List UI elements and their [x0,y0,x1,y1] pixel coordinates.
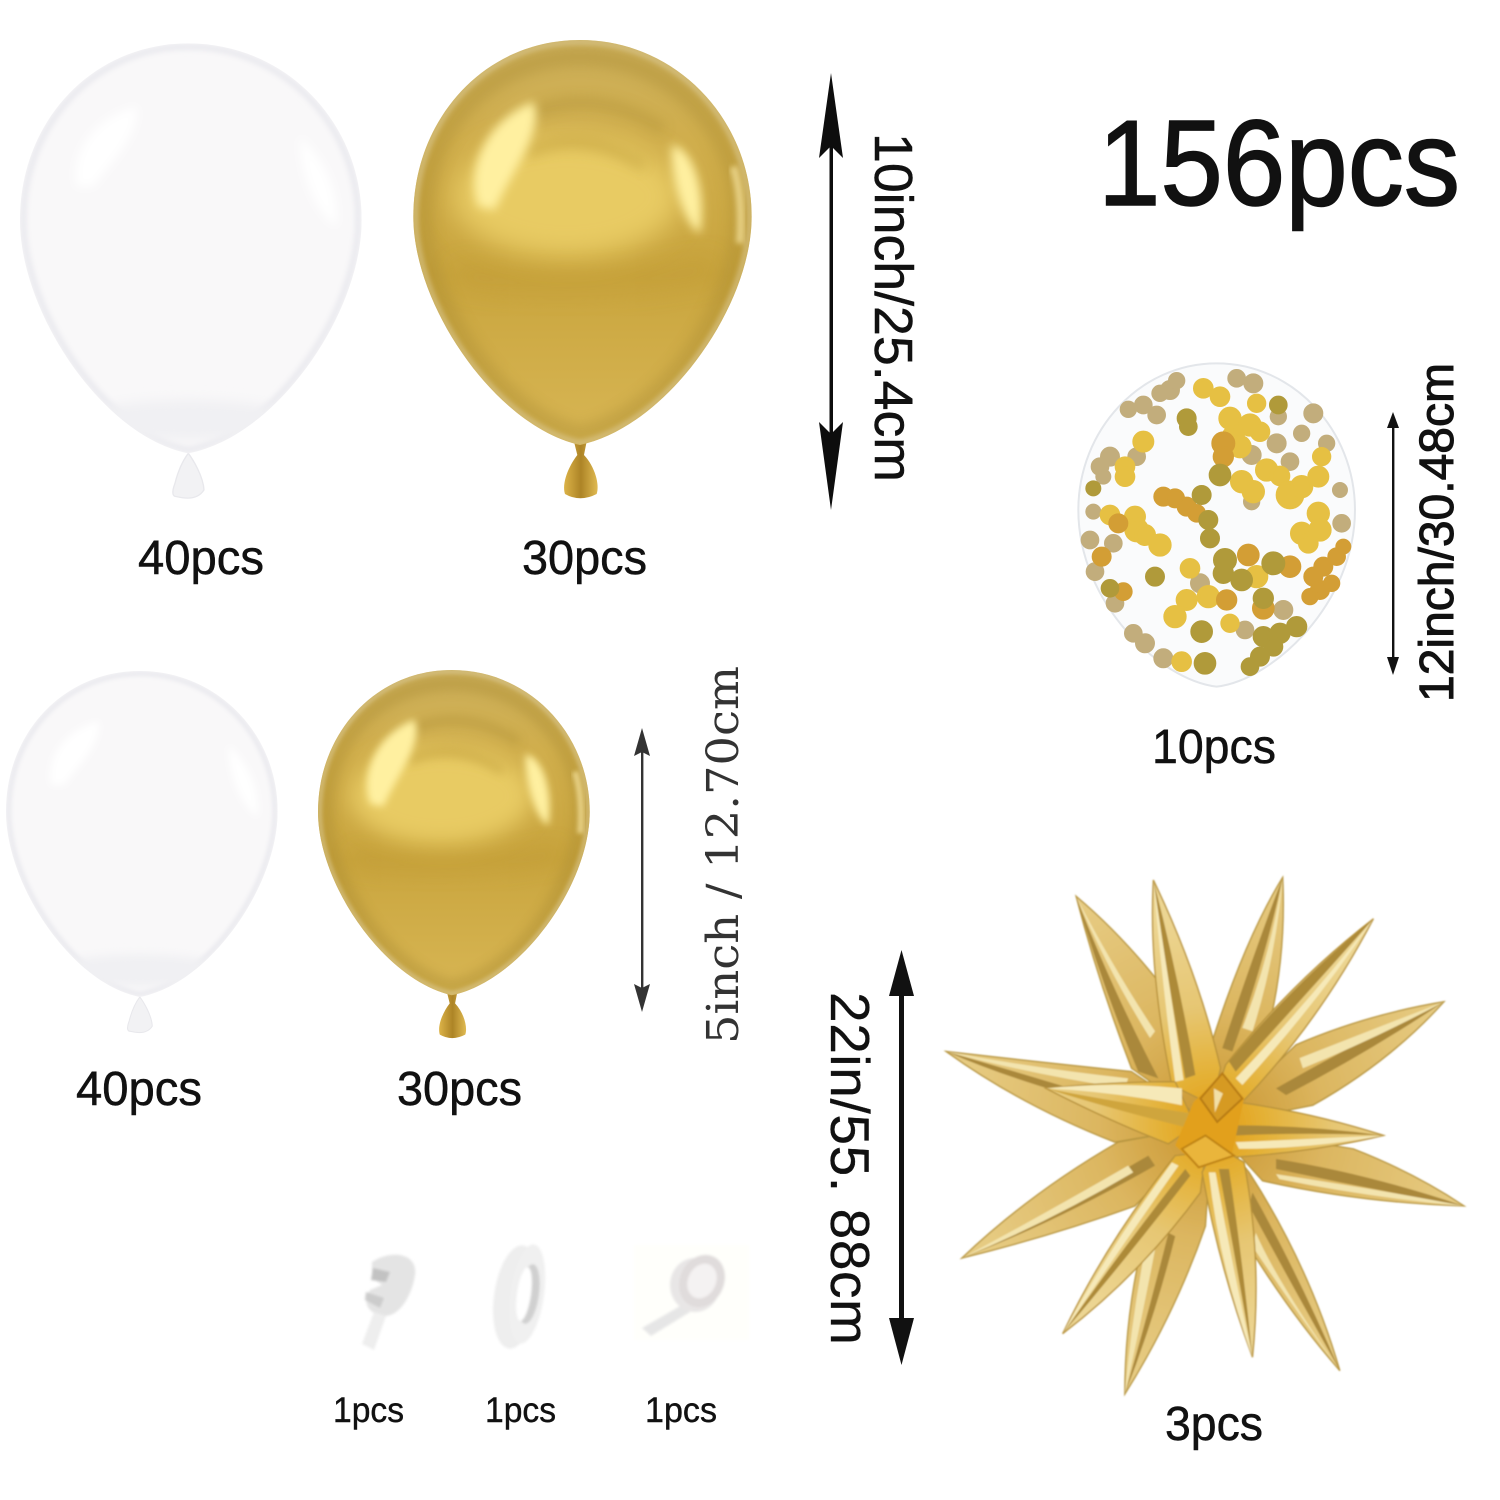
icon: large white balloon [20,43,362,498]
label: accessory 1 quantity: 1pcs [333,1391,404,1430]
dimension text: 10 inch: 10inch/25.4cm [863,133,923,482]
label: confetti balloon quantity: 10pcs [1152,721,1276,774]
label: large white balloon quantity: 40pcs [138,532,264,585]
arrow: 5 inch dimension [634,728,650,1012]
confetti: yellow dots [1101,380,1330,670]
confetti: orange dots [1093,433,1350,618]
confetti: olive dots [1087,397,1306,675]
arrow: 10 inch dimension [819,73,843,510]
icon: balloon glue dot strip [362,1255,415,1350]
title: total count: 156pcs [1098,95,1460,231]
dimension text: 5 inch: 5inch / 12.70cm [698,666,749,1044]
icon: balloon dot glue roll [634,1245,749,1340]
icon: gold confetti balloon [1078,363,1355,687]
label: accessory 2 quantity: 1pcs [485,1391,556,1430]
label: starburst quantity: 3pcs [1165,1398,1263,1451]
label: large gold balloon quantity: 30pcs [522,532,647,585]
confetti: tan dots [1082,370,1350,667]
icon: gold starburst balloon [946,877,1464,1394]
arrow: 12 inch dimension [1387,412,1399,675]
arrow: 22 inch dimension [889,950,914,1365]
dimension text: 12 inch: 12inch/30.48cm [1411,363,1464,702]
label: accessory 3 quantity: 1pcs [645,1391,717,1430]
icon: large gold balloon [413,40,752,498]
icon: small white balloon [6,671,278,1033]
label: small gold balloon quantity: 30pcs [397,1063,522,1116]
icon: balloon ribbon roll [487,1242,551,1352]
dimension text: 22 inch: 22in/55. 88cm [819,992,881,1345]
label: small white balloon quantity: 40pcs [76,1063,202,1116]
icon: small gold balloon [318,670,590,1038]
